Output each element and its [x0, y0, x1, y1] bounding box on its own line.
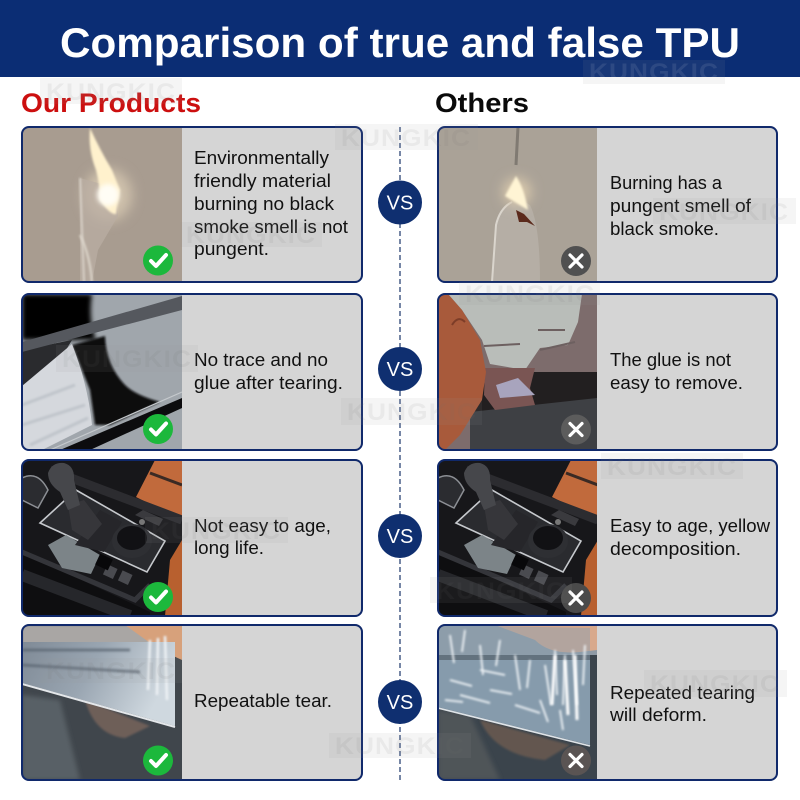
photo: car centre console aged	[438, 460, 598, 616]
icon: green check	[143, 414, 173, 444]
photo: glue residue on trim with fingers	[438, 294, 597, 450]
watermark: KUNGKIC	[347, 399, 477, 426]
center dashed divider	[399, 127, 401, 781]
text block: black smoke.	[610, 218, 719, 239]
panel: our products tearing	[21, 293, 363, 451]
watermark: KUNGKIC	[589, 59, 719, 86]
text block: pungent smell of	[610, 195, 752, 216]
text block: Easy to age, yellow	[610, 515, 771, 536]
text block: burning no black	[194, 193, 335, 214]
watermark: KUNGKIC	[46, 79, 176, 106]
text block: Repeated tearing	[610, 682, 755, 703]
watermark: KUNGKIC	[335, 733, 465, 760]
text block	[610, 349, 743, 393]
heading: our products: Our Products	[21, 88, 201, 118]
text block	[194, 349, 343, 393]
photo: burning film with charred edge	[438, 127, 597, 282]
icon: grey cross	[561, 746, 591, 776]
vs badge 3	[378, 514, 422, 558]
watermark: KUNGKIC	[650, 671, 780, 698]
panel: our products ageing	[21, 459, 363, 617]
panel: others tearing	[437, 293, 778, 451]
photo: smooth film being peeled	[22, 625, 182, 780]
text block: smoke smell is not	[194, 216, 348, 237]
photo: crinkled film deformed	[438, 625, 597, 780]
icon: green check	[143, 746, 173, 776]
heading: others: Others	[435, 88, 529, 118]
watermark: KUNGKIC	[62, 346, 192, 373]
text block: Burning has a	[610, 172, 723, 193]
text block: Environmentally	[194, 147, 330, 168]
panel: our products burning	[21, 126, 363, 283]
text block	[609, 682, 755, 725]
watermark: KUNGKIC	[659, 199, 789, 226]
panel: our products repeat tear	[21, 624, 363, 781]
panel: others repeat tear	[437, 624, 778, 781]
vs badge 2: VS	[387, 359, 413, 381]
icon: grey cross	[561, 414, 591, 444]
text block	[194, 147, 348, 259]
text block: long life.	[194, 537, 264, 558]
title banner	[0, 0, 800, 77]
icon: green check	[143, 582, 173, 612]
photo: burning clear film with bright flame	[22, 127, 182, 282]
watermark: KUNGKIC	[186, 222, 316, 249]
vs badge 1: VS	[387, 192, 413, 214]
watermark: KUNGKIC	[465, 281, 595, 308]
text block	[194, 515, 331, 558]
text block: friendly material	[194, 170, 331, 191]
text block	[610, 172, 752, 239]
watermark: KUNGKIC	[436, 578, 566, 605]
vs badge 4	[378, 680, 422, 724]
text block: No trace and no	[194, 349, 328, 370]
photo: clean film peeled from trim	[22, 294, 182, 450]
icon: grey cross	[561, 583, 591, 613]
watermark: KUNGKIC	[341, 125, 471, 152]
text block: Not easy to age,	[194, 515, 331, 536]
text block: glue after tearing.	[194, 372, 343, 393]
watermark: KUNGKIC	[151, 518, 281, 545]
title: Comparison of true and false TPU	[60, 19, 740, 66]
text block: pungent.	[194, 238, 269, 259]
text block: will deform.	[609, 704, 707, 725]
text block: decomposition.	[610, 538, 741, 559]
vs badge 2	[378, 347, 422, 391]
icon: green check	[143, 246, 173, 276]
text block: easy to remove.	[610, 372, 743, 393]
text block: The glue is not	[610, 349, 731, 370]
vs badge 3: VS	[387, 526, 413, 548]
text block: Repeatable tear.	[194, 690, 332, 711]
panel: others burning	[437, 126, 778, 283]
photo: car centre console	[22, 460, 182, 616]
watermark: KUNGKIC	[607, 454, 737, 481]
vs badge 1	[378, 180, 422, 224]
watermark: KUNGKIC	[46, 658, 176, 685]
vs badge 4: VS	[387, 692, 413, 714]
icon: grey cross	[561, 246, 591, 276]
text block	[610, 515, 771, 559]
panel: others ageing	[437, 459, 778, 617]
